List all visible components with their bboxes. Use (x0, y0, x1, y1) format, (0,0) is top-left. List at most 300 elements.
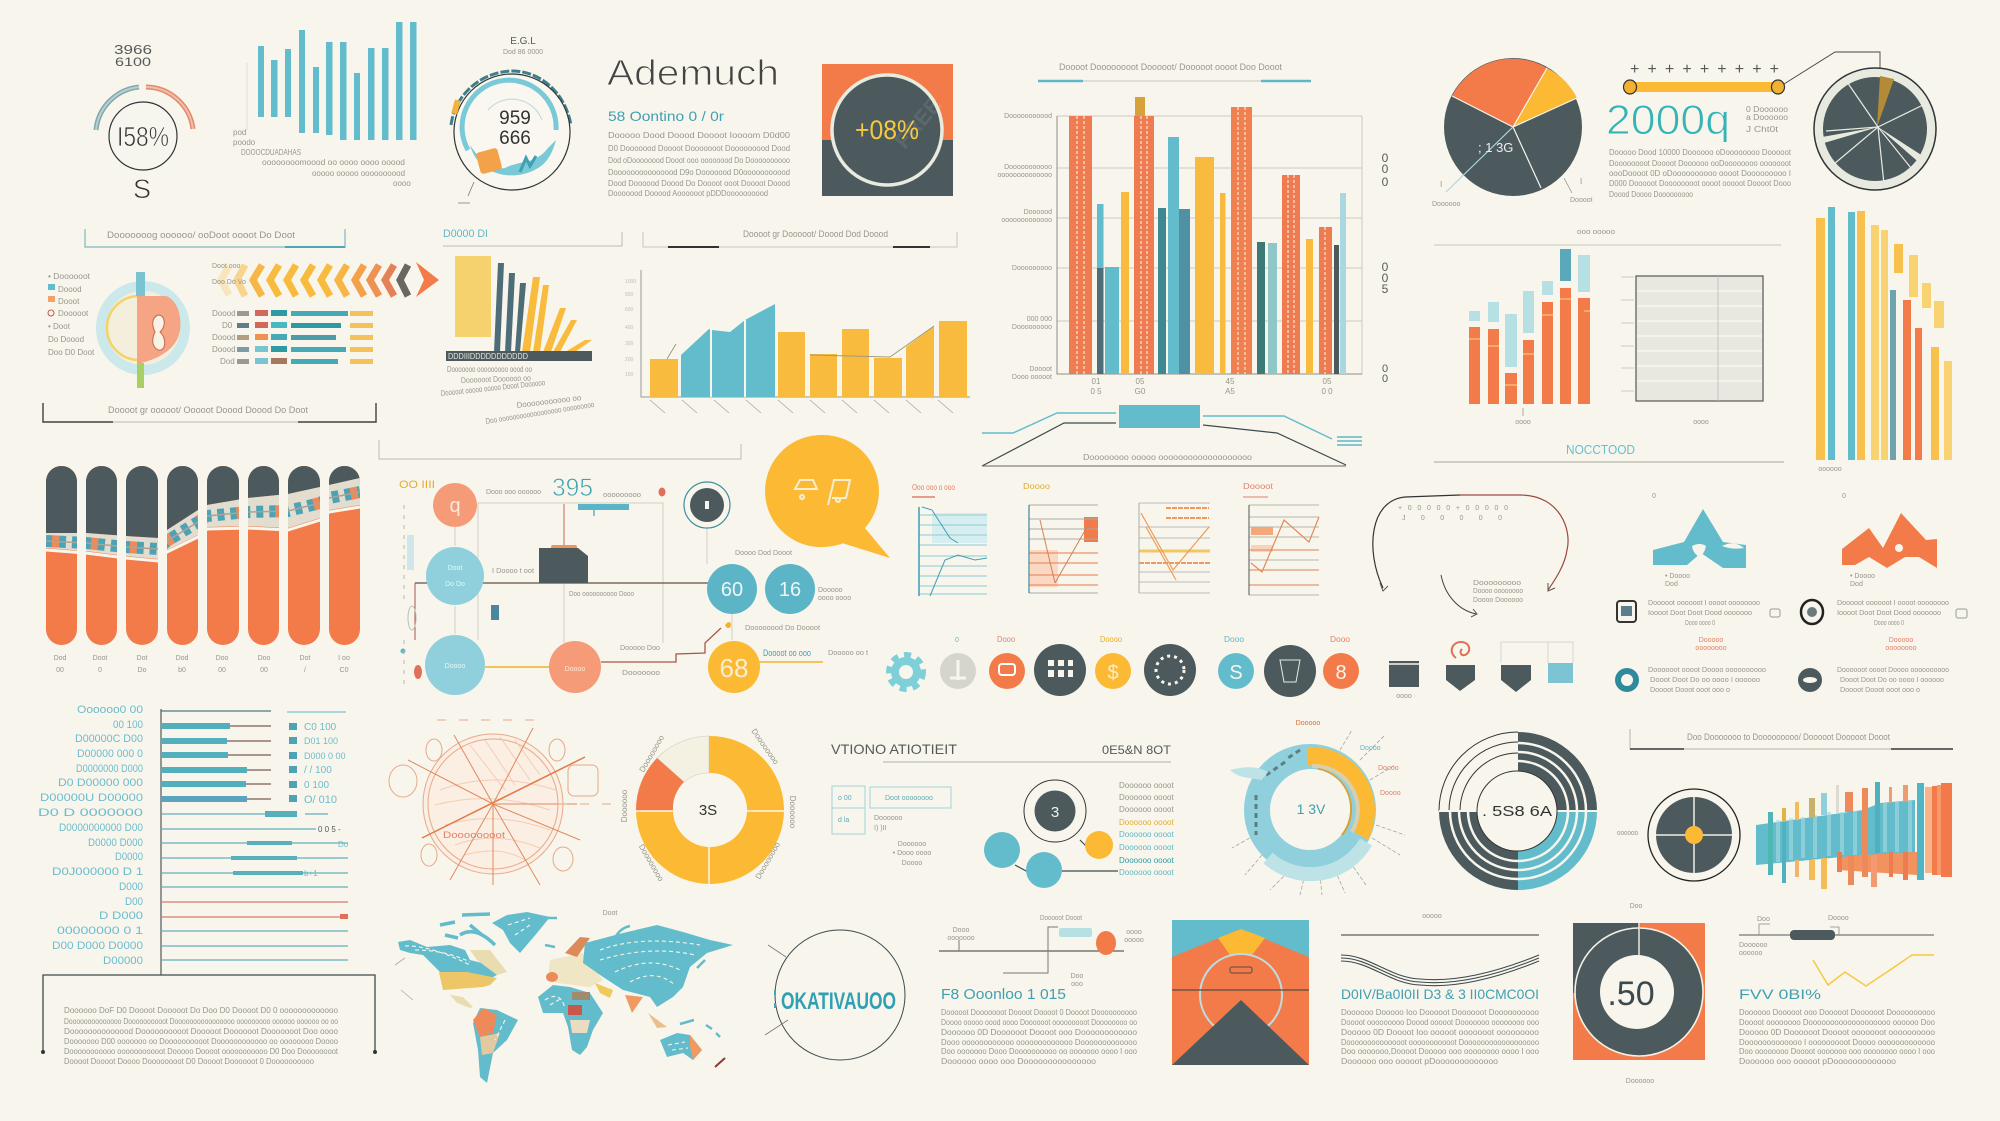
square top (822, 64, 953, 140)
slanted notes: Dooooooo ooooooooo oood oo (447, 365, 532, 374)
note 5: Doooot Dooot ooot ooo o (1650, 687, 1730, 694)
chart 1: Ooo ooo o ooo (912, 483, 955, 492)
legend rows: Doooooo oooot (1119, 830, 1174, 839)
row labels: D0 D 0000000 (38, 807, 143, 819)
donut labels: Doooooo (788, 796, 797, 829)
pill labels: b0 (178, 667, 186, 674)
bracket title: Doooot gr ooooot/ Ooooot Doood Doood Do Doot (108, 405, 309, 415)
yellow bars (1816, 211, 1952, 460)
yellow bars (650, 321, 967, 397)
small boxes (832, 786, 951, 834)
flow annotations: Doooooood Do Doooot (745, 625, 820, 632)
row labels: D00000 (103, 955, 143, 967)
base ring (1257, 757, 1363, 863)
icon labels: Dooo (1330, 635, 1351, 644)
tan inner band (1312, 766, 1358, 832)
right symbols: 0 (1382, 162, 1389, 176)
bracket accent (285, 246, 345, 248)
pie notes: Doooot (1570, 197, 1593, 204)
vertical axis (160, 709, 162, 975)
row markers: b+1 (304, 869, 318, 878)
note 4 orange label: Dooooo (1889, 637, 1913, 644)
watermark: FREE (890, 92, 947, 153)
donut labels: Doooooooo (637, 843, 666, 883)
yellow crescent (1307, 747, 1375, 840)
pills with wave (46, 466, 360, 645)
block paragraph: Doooooo oooo ooo Dooooooooooooooo (941, 1057, 1097, 1066)
New Zealand (715, 1058, 725, 1067)
small notes: J Cht0t (1746, 125, 1779, 134)
footnote paragraph: Dooooooooooo ooooooooooot Dooooo Doooot ooooooooooo D0 Doo Doooooooot (64, 1047, 339, 1056)
shield 3 (1501, 665, 1531, 692)
side circles (389, 765, 417, 797)
footnote paragraph: Doooooooooooood Doooooooooot Dooooot Doooooot Dooooooot Doo oooo (64, 1027, 339, 1036)
left labels (997, 113, 1052, 381)
salmon half (137, 296, 180, 364)
left labels: ooooooooooooo (1001, 217, 1052, 224)
donut labels (620, 727, 797, 883)
x labels: 05 (1323, 377, 1332, 386)
red lines (161, 902, 348, 917)
chart labels: oooooooomoood oo oooo oooo ooood (262, 158, 405, 167)
note 5: Dooot Doot Do oo oooo I oooooo (1650, 677, 1760, 684)
shield 2 (1446, 665, 1475, 691)
vertical bar bottom (137, 363, 144, 388)
node: dark ring (684, 482, 730, 528)
table rows (212, 309, 373, 366)
label text: NOCCTOOD (1566, 442, 1635, 457)
North America (398, 940, 497, 980)
top capsule (1230, 967, 1252, 973)
bracket frame (43, 403, 376, 422)
right symbols: 0 (1382, 175, 1389, 189)
table header: Doot ooo (212, 263, 241, 270)
chart labels: pod (233, 128, 246, 137)
right symbols: 0 (1382, 260, 1389, 274)
side notes: Doooo (1360, 745, 1381, 752)
block paragraph: Doooooo Dooooot ooo Dooooot Doooooot Doooooooooo (1739, 1008, 1936, 1017)
note 4 orange label: oooooooo (1885, 645, 1917, 652)
cross gaps (1656, 797, 1732, 873)
node: salmon top (433, 483, 477, 527)
row markers: Do (338, 840, 349, 849)
panel: area bar chart (625, 270, 970, 413)
block paragraph (1739, 1008, 1936, 1066)
icon labels: Dooo (997, 635, 1016, 644)
row markers: C0 100 (304, 722, 337, 733)
node: teal bottom (425, 635, 485, 695)
dark connectors (982, 423, 1346, 466)
icon labels: Dooo (1224, 635, 1245, 644)
panel: icon notes (1615, 600, 1967, 694)
yellow hub (1685, 826, 1703, 844)
pill labels: 00 (260, 667, 268, 674)
node: salmon top: q (449, 495, 461, 517)
dark disc (1823, 77, 1927, 181)
note 2: Dooo oooo 0 (1874, 620, 1904, 627)
top left arcs (1439, 732, 1518, 811)
bottom right teal (1518, 811, 1597, 890)
map texture (405, 918, 700, 1050)
x labels: 01 (1092, 377, 1101, 386)
node: teal middle (426, 547, 484, 605)
dark base (446, 351, 592, 361)
legend rows: Doooooo oooot (1119, 856, 1174, 865)
gauge top label: 3966 (114, 42, 152, 57)
dark fan bars (494, 263, 526, 352)
Andes tint (473, 1008, 497, 1037)
small notes (1746, 105, 1789, 134)
left labels: Dooooooooo (1012, 265, 1052, 272)
mountain notes: 0 (1842, 493, 1846, 500)
axis labels: 400 (625, 325, 634, 331)
orange circle (989, 653, 1025, 689)
inner disc (1272, 769, 1350, 847)
yellow fan bars (522, 277, 592, 352)
axis labels (625, 279, 636, 378)
Greenland (492, 912, 550, 953)
row labels: D D000 (99, 910, 143, 922)
center gap (1439, 810, 1597, 812)
left labels: Dooooooooood (1004, 113, 1052, 120)
Africa red (568, 1005, 582, 1015)
panel: mountain shapes (1652, 493, 1937, 588)
block paragraph: Dooooo 0D Doooooot Doooot ooooooot oooooooooo (1739, 1028, 1936, 1037)
paragraph: oooDoooot 0D oDoooooooooo oooot Dooooooooo I (1609, 169, 1791, 178)
flow annotations: Dooooo (818, 587, 843, 594)
bubble shape (765, 435, 890, 558)
bars (1069, 97, 1346, 374)
pie notes: Doooooo (1432, 201, 1461, 208)
chart labels: DOOOCDUADAHAS (241, 148, 301, 157)
pale yellow columns (455, 256, 491, 337)
panel: shields (1389, 642, 1573, 700)
legend: Dooot (58, 297, 80, 306)
axis labels: 1000 (625, 279, 636, 285)
flow heading: OO IIII (399, 479, 435, 491)
bracket: target header (85, 229, 345, 247)
chart title: Doooot Doooooooot Dooooot/ Dooooot oooot Doo Dooot (1059, 62, 1282, 72)
row labels (38, 704, 143, 967)
ring value: . 5S8 6A (1482, 803, 1552, 820)
teal block (1119, 405, 1200, 428)
gauge arc highlights (96, 87, 193, 130)
bottom tick and label (1522, 408, 1524, 416)
pill labels: 00 (56, 667, 64, 674)
yellow inner arc (107, 296, 139, 360)
wave lines (1341, 955, 1539, 986)
legend: Doood (58, 285, 82, 294)
orange body (1172, 929, 1309, 1065)
pale tag (1059, 928, 1092, 937)
mountain notes: • Doooo (1850, 573, 1875, 580)
small notes: • Dooo oooo (893, 850, 931, 857)
map small label: Doot (603, 910, 617, 917)
slice dividers (1452, 68, 1577, 188)
block paragraph: Doo oooooooo Doooot ooooooo ooo oooooooo oooo I ooo (1739, 1047, 1936, 1056)
x labels: 45 (1226, 377, 1235, 386)
block paragraph: Doo ooooooo Dooo Doooooooooo oo ooooooo oooo I ooo (941, 1047, 1138, 1056)
outer ring (101, 286, 185, 370)
row labels: D000 (119, 881, 143, 893)
note 1 (1617, 600, 1780, 627)
node: teal sixty: 60 (721, 579, 743, 601)
panel: strip band chart (1756, 782, 1952, 889)
horizon line (1172, 989, 1309, 991)
chart 3 (1139, 503, 1210, 593)
inner ring (488, 99, 542, 120)
chart 2: Doooo (1023, 482, 1051, 491)
node: teal sixteen: 16 (779, 579, 801, 601)
flow annotations (486, 489, 868, 677)
yellow slice (1513, 68, 1577, 127)
table rows: Doood (212, 345, 236, 354)
Canada east pale (470, 950, 507, 975)
connector lines (415, 503, 823, 667)
bracket title: D0000 DI (443, 228, 488, 240)
row labels: D00000U D00000 (40, 792, 143, 804)
teal bars (1828, 207, 1896, 460)
panel: world map (395, 910, 733, 1083)
baseline (939, 950, 1124, 952)
x labels: G0 (1135, 387, 1146, 396)
row labels: D00000C D00 (75, 733, 143, 745)
teal block (1548, 663, 1573, 683)
panel: stacked bars (1434, 229, 1781, 426)
mountain notes: Dod (1850, 581, 1863, 588)
small boxes: d la (838, 817, 849, 824)
donut labels: Doooooooo (754, 840, 782, 881)
square bottom (822, 140, 953, 196)
block heading: D0IV/Ba0I0II D3 & 3 II0CMC0OI (1341, 986, 1539, 1002)
paragraph: Dooooo Dood 10000 Doooooo oDoooooooo Dooooot (1609, 148, 1792, 157)
top labels: ooooo (1124, 937, 1144, 944)
slanted ticks (650, 400, 953, 413)
bracket: flow header (379, 440, 741, 459)
panel: percent square (822, 64, 953, 196)
slanted notes: Dooooot ooooo ooooo Dooot Doooooo (440, 378, 546, 398)
paragraph: Dood Doooood Doood Do Doooot ooot Doooot Doood (608, 179, 790, 188)
note 6 (1798, 667, 1949, 694)
spiked outer arc (451, 71, 571, 125)
chart labels: ooooo ooooo oooooooood (312, 169, 405, 178)
top labels: ooooooo (947, 935, 975, 942)
flow annotations: Doooot oo ooo (763, 648, 811, 658)
Europe pale (548, 953, 603, 987)
legend: • Doot (48, 322, 71, 331)
dashed leaders (437, 720, 611, 804)
donut hole (1600, 955, 1674, 1029)
islands (545, 918, 720, 1037)
panel: geometric square (1172, 920, 1309, 1065)
pill labels: Dot (300, 655, 310, 662)
footnote paragraph: Doooooooooooooo Doooooooooot Doooooooooooooooo ooooooooo oooooo oooooo oo oo (64, 1017, 338, 1026)
panel: circled word (765, 930, 905, 1060)
Africa (538, 985, 603, 1055)
teal connectors (982, 413, 1332, 439)
row markers: 0 0 5 - (318, 825, 341, 834)
small labels: Doooo (1828, 915, 1849, 922)
texture marks (1256, 750, 1300, 835)
upper strips (1768, 785, 1908, 875)
teal mountain (1653, 509, 1746, 568)
axis (641, 270, 970, 397)
leader line (1446, 127, 1513, 192)
legend rows: Doooooo oooot (1119, 805, 1174, 814)
pie notes (1432, 177, 1593, 208)
block paragraph: Doo ooooooo,Doooot Dooooo ooo oooooooo oooo I ooo (1341, 1047, 1540, 1056)
top labels: Dooo (953, 927, 969, 934)
side notes (1360, 745, 1401, 797)
mountain notes: 0 (1652, 493, 1656, 500)
arc labels: Dooooooooo (1473, 580, 1521, 587)
pill labels: Doo (258, 655, 271, 662)
Australia (660, 1033, 702, 1060)
panel: horizontal bar list (38, 704, 349, 975)
panel: colored table: Doo Do Vo (212, 279, 246, 286)
header rule (1434, 244, 1781, 246)
flow annotations: Dooooo Doo (620, 645, 660, 652)
inner disc (1477, 771, 1557, 851)
panel: speech bubble (765, 435, 890, 558)
teal area (681, 304, 775, 397)
panel: fan chart (440, 256, 595, 426)
block paragraph: Dooooooooooooo I ooooooooot Doooo ooooooooooooo (1739, 1038, 1936, 1047)
right symbols: 0 (1382, 271, 1389, 285)
axis labels: 200 (625, 357, 634, 363)
chart 1 (912, 483, 987, 596)
small notes: Doooooo (898, 841, 926, 848)
axis labels: 800 (625, 292, 634, 298)
pie inner label: ; 1 3G (1478, 140, 1513, 155)
circled word text: OKATIVAUOO (781, 988, 896, 1015)
folder icon (539, 545, 588, 583)
bar end caps (1624, 80, 1636, 94)
area dividers (711, 320, 745, 397)
chart labels: poodo (233, 138, 256, 147)
panel: circular badge: Dod 86 0000 (503, 49, 543, 56)
orange circle: eight: 8 (1335, 662, 1347, 684)
small labels (1739, 915, 1849, 957)
panel: target diagram (48, 272, 185, 388)
top labels: oooo (1126, 929, 1142, 936)
thin lines (161, 814, 348, 960)
panel: text block two (1341, 913, 1540, 1066)
large arc right (1460, 495, 1568, 590)
rule (1341, 934, 1539, 936)
bracket frame (85, 229, 345, 247)
top labels (947, 915, 1144, 988)
small notes: a Doooooo (1746, 113, 1789, 122)
paragraph: Dooooooooooooood D9o Dooooood D0ooooooooood (608, 168, 790, 177)
side notes: Doooo (1380, 790, 1401, 797)
top gap (1638, 923, 1640, 955)
title rule accents (1038, 80, 1311, 82)
arc labels: Doooo oooooooo (1473, 588, 1523, 595)
heading: Ademuch (607, 52, 779, 93)
panel: colored ring (1230, 720, 1405, 895)
spiral icon (1452, 642, 1469, 658)
right symbols: 0 (1382, 373, 1388, 385)
orange bars (1903, 300, 1922, 460)
mountain notes: Dod (1665, 581, 1678, 588)
pie body (1444, 58, 1582, 196)
bridge caption: Doooooooo ooooo ooooooooooooooooooo (1083, 453, 1253, 462)
leader to dial (1784, 52, 1880, 127)
thick teal bars (161, 723, 303, 875)
small notes (874, 815, 931, 867)
bar accents (1469, 299, 1590, 385)
note 2: Dooooot oooooot I oooot oooooooo (1837, 600, 1949, 607)
badge outline (454, 74, 570, 190)
title rule (1038, 80, 1311, 82)
small notes: Doooooo (874, 815, 903, 822)
text block: intro (608, 108, 791, 198)
bottom left dark (1439, 811, 1518, 890)
inner circle (428, 739, 558, 869)
legend rows: Doooooo oooot (1119, 843, 1174, 852)
arc labels: + 0 0 0 0 0 + 0 0 0 0 0 (1398, 505, 1508, 512)
dashed bar stripes (1077, 107, 1325, 374)
slanted notes (440, 365, 595, 426)
block paragraph: Doooot oooooooo Dooooooooooooooooooo oooooo Doo (1739, 1018, 1936, 1027)
right symbols: 0 (1382, 363, 1388, 375)
row markers (289, 722, 349, 919)
paragraph: Dod oDoooooood Dooot ooo oooooood Do Doooooooooo (608, 156, 790, 165)
paragraph (1609, 148, 1792, 199)
panel: flow bridge (982, 405, 1362, 466)
arc labels: J 0 0 0 0 0 (1402, 515, 1502, 522)
header label: ooo ooooo (1577, 229, 1615, 236)
right symbols: 5 (1382, 282, 1389, 296)
teal node left (984, 832, 1020, 868)
dark tails (227, 726, 271, 799)
panel: footnote bracket (41, 975, 377, 1066)
paragraph: D000 Dooooot Doooooooot oooot ooooot Doooot Dooo (1609, 179, 1792, 188)
paragraph: D0 Dooooood Doooot Dooooooot Dooooooood Dood (608, 144, 790, 153)
heading left: VTIONO ATIOTIEIT (831, 741, 957, 757)
panel: circular badge (451, 36, 571, 203)
panel: gauge: 6100 (115, 55, 151, 69)
pill labels: Do (138, 667, 147, 674)
chart labels (233, 128, 411, 188)
baseline (982, 465, 1346, 467)
outer ring (1648, 789, 1740, 881)
dividers (636, 811, 784, 885)
orange bars (1469, 288, 1590, 404)
pill labels: I oo (338, 655, 350, 662)
block paragraph: Doooo ooooo oood oooo Doooooot ooooooooot Doooooooo oo (941, 1018, 1137, 1027)
SE Asia (648, 1013, 667, 1028)
row labels: 00000000 0 1 (57, 925, 143, 937)
note 2: Ioooot Doot Doot Dood ooooooo (1837, 610, 1941, 617)
note 3 orange label (1695, 637, 1727, 652)
left labels: 000 000 (1027, 316, 1052, 323)
bracket frame (643, 232, 957, 247)
heading right: 0E5&N 8OT (1102, 743, 1172, 757)
hatching (435, 737, 556, 860)
note 5: Doooooot oooot Doooo oooooooooo (1648, 667, 1766, 674)
block paragraph: Doooooo ooo ooooot pDooooooooooooo (1341, 1057, 1499, 1066)
paragraph: Dooooo Dood Doood Doooot Ioooom D0d00 (608, 131, 791, 140)
badge value: 959 (499, 108, 531, 129)
yellow inner rim (1318, 769, 1351, 835)
elbow line (959, 927, 1058, 973)
large arc left (1373, 495, 1460, 588)
bracket: target footer (43, 403, 376, 422)
legend: Do Doood (48, 335, 84, 344)
top right rule (287, 711, 346, 713)
